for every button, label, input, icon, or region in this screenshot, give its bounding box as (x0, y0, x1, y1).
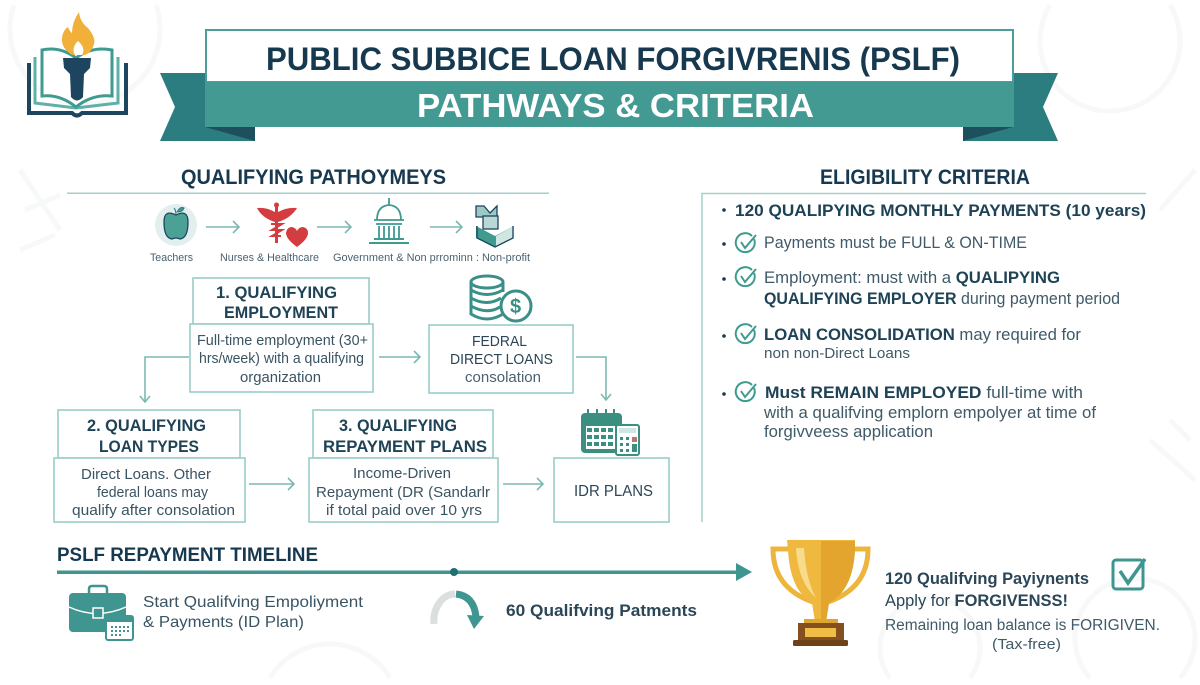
timeline step: forgiveness text: Remaining loan balance is FORIGIVEN. (885, 617, 1160, 634)
logo: book and torch (29, 12, 126, 116)
arrow: repayment plans to IDR plans (503, 478, 543, 490)
flow box 2: qualifying loan types: LOAN TYPES (99, 437, 199, 456)
icon: checkbox (1113, 559, 1145, 589)
flow box: federal direct loans: consolation (465, 370, 541, 386)
flow box 3: qualifying repayment plans: REPAYMENT PLANS (323, 437, 487, 456)
flow box 2: qualifying loan types: Direct Loans. Other (81, 467, 211, 483)
flow box 3: qualifying repayment plans (309, 410, 498, 522)
timeline step: forgiveness text (885, 570, 1160, 653)
arrow: federal loans to IDR plans (576, 357, 611, 400)
flow box: IDR plans (554, 458, 669, 522)
arrow: employment to federal loans (379, 351, 420, 363)
title line one: PUBLIC SUBBICE LOAN FORGIVRENIS (PSLF) (266, 41, 960, 77)
flow box 2: qualifying loan types: 2. QUALIFYING (87, 416, 206, 435)
flow box: federal direct loans (429, 325, 573, 393)
heading: repayment timeline: PSLF REPAYMENT TIMELINE (57, 545, 318, 566)
criterion: employment: Employment: must with a QUALIPYING (764, 269, 1060, 287)
icon: non-profit hands (476, 206, 514, 247)
timeline step: 60 payments: 60 Qualifving Patments (506, 601, 697, 620)
criterion: remain employed: with a qualifving emplorn empolyer at time of (763, 404, 1096, 422)
criterion: loan consolidation (722, 324, 1082, 362)
criterion: loan consolidation: LOAN CONSOLIDATION may required for (764, 326, 1082, 344)
heading: qualifying pathways: QUALIFYING PATHOYMEYS (181, 166, 446, 189)
criterion: employment: QUALIFYING EMPLOYER during payment period (764, 290, 1120, 308)
criterion: remain employed: Must REMAIN EMPLOYED full-time with (765, 384, 1083, 402)
left ribbon tail (160, 73, 255, 141)
criterion: remain employed: forgivveess application (764, 423, 933, 441)
timeline step: forgiveness text: (Tax-free) (992, 636, 1061, 653)
icon: calendar and calculator (581, 409, 639, 455)
arrow (206, 221, 239, 233)
flow box 3: qualifying repayment plans: Repayment (DR (Sandarlr (316, 485, 490, 501)
icon: coins and dollar (471, 276, 531, 321)
arrow (317, 221, 351, 233)
flow box 2: qualifying loan types: federal loans may (97, 485, 209, 501)
label: nurses: Nurses & Healthcare (220, 252, 319, 264)
icon: trophy (773, 540, 868, 646)
flow box 3: qualifying repayment plans: if total paid over 10 yrs (326, 503, 482, 519)
flow box: federal direct loans: DIRECT LOANS (450, 351, 553, 368)
arrow (430, 221, 462, 233)
criterion: full and on-time: Payments must be FULL & ON-TIME (764, 234, 1027, 252)
icon: coins and dollar: $ (510, 296, 521, 318)
arrow: employment to loan types (140, 357, 189, 402)
right ribbon tail (963, 73, 1058, 141)
flow box 1: qualifying employment: organization (240, 370, 321, 386)
timeline step: start (143, 594, 364, 631)
panel frame (702, 194, 1146, 522)
flow box 1: qualifying employment: EMPLOYMENT (224, 303, 339, 322)
flow box 3: qualifying repayment plans: Income-Driven (353, 466, 451, 482)
icon: half progress arc (434, 594, 484, 629)
flow box: IDR plans: IDR PLANS (574, 483, 653, 500)
flow box 2: qualifying loan types: qualify after consolation (72, 503, 235, 519)
panel: eligibility criteria (702, 166, 1146, 522)
flow box 1: qualifying employment: Full-time employment (30+ (197, 333, 368, 349)
label: teachers: Teachers (150, 252, 193, 264)
flow box 1: qualifying employment: hrs/week) with a qualifying (199, 351, 364, 367)
icon: caduceus and heart (257, 202, 308, 247)
icon: apple (155, 204, 197, 246)
flow box: federal direct loans: FEDRAL (472, 333, 527, 350)
timeline step: start: & Payments (ID Plan) (143, 614, 304, 631)
criterion: employment (722, 267, 1120, 308)
criterion: loan consolidation: non non-Direct Loans (764, 345, 910, 362)
timeline step: forgiveness text: Apply for FORGIVENSS! (885, 592, 1068, 610)
criterion: 120 payments: 120 QUALIPYING MONTHLY PAYMENTS (10 years) (735, 201, 1146, 220)
flow box 1: qualifying employment: 1. QUALIFYING (216, 283, 337, 302)
arrow: loan types to repayment plans (249, 478, 294, 490)
heading: eligibility criteria: ELIGIBILITY CRITERIA (820, 166, 1030, 189)
banner box (205, 30, 1014, 127)
flow box 2: qualifying loan types (54, 410, 245, 522)
criterion: remain employed (722, 382, 1096, 441)
timeline step: start: Start Qualifving Empoliyment (143, 594, 364, 611)
icon: briefcase and calendar (69, 586, 133, 640)
title line two: PATHWAYS & CRITERIA (417, 87, 814, 124)
flow box 1: qualifying employment (190, 278, 373, 392)
title banner (160, 30, 1058, 141)
timeline step: forgiveness text: 120 Qualifving Payiynents (885, 570, 1089, 588)
label: government: Government & Non prrominn : Non-profit (333, 252, 530, 264)
icon: capitol (369, 198, 409, 243)
timeline arrow (57, 563, 752, 581)
flow box 3: qualifying repayment plans: 3. QUALIFYING (339, 416, 457, 435)
